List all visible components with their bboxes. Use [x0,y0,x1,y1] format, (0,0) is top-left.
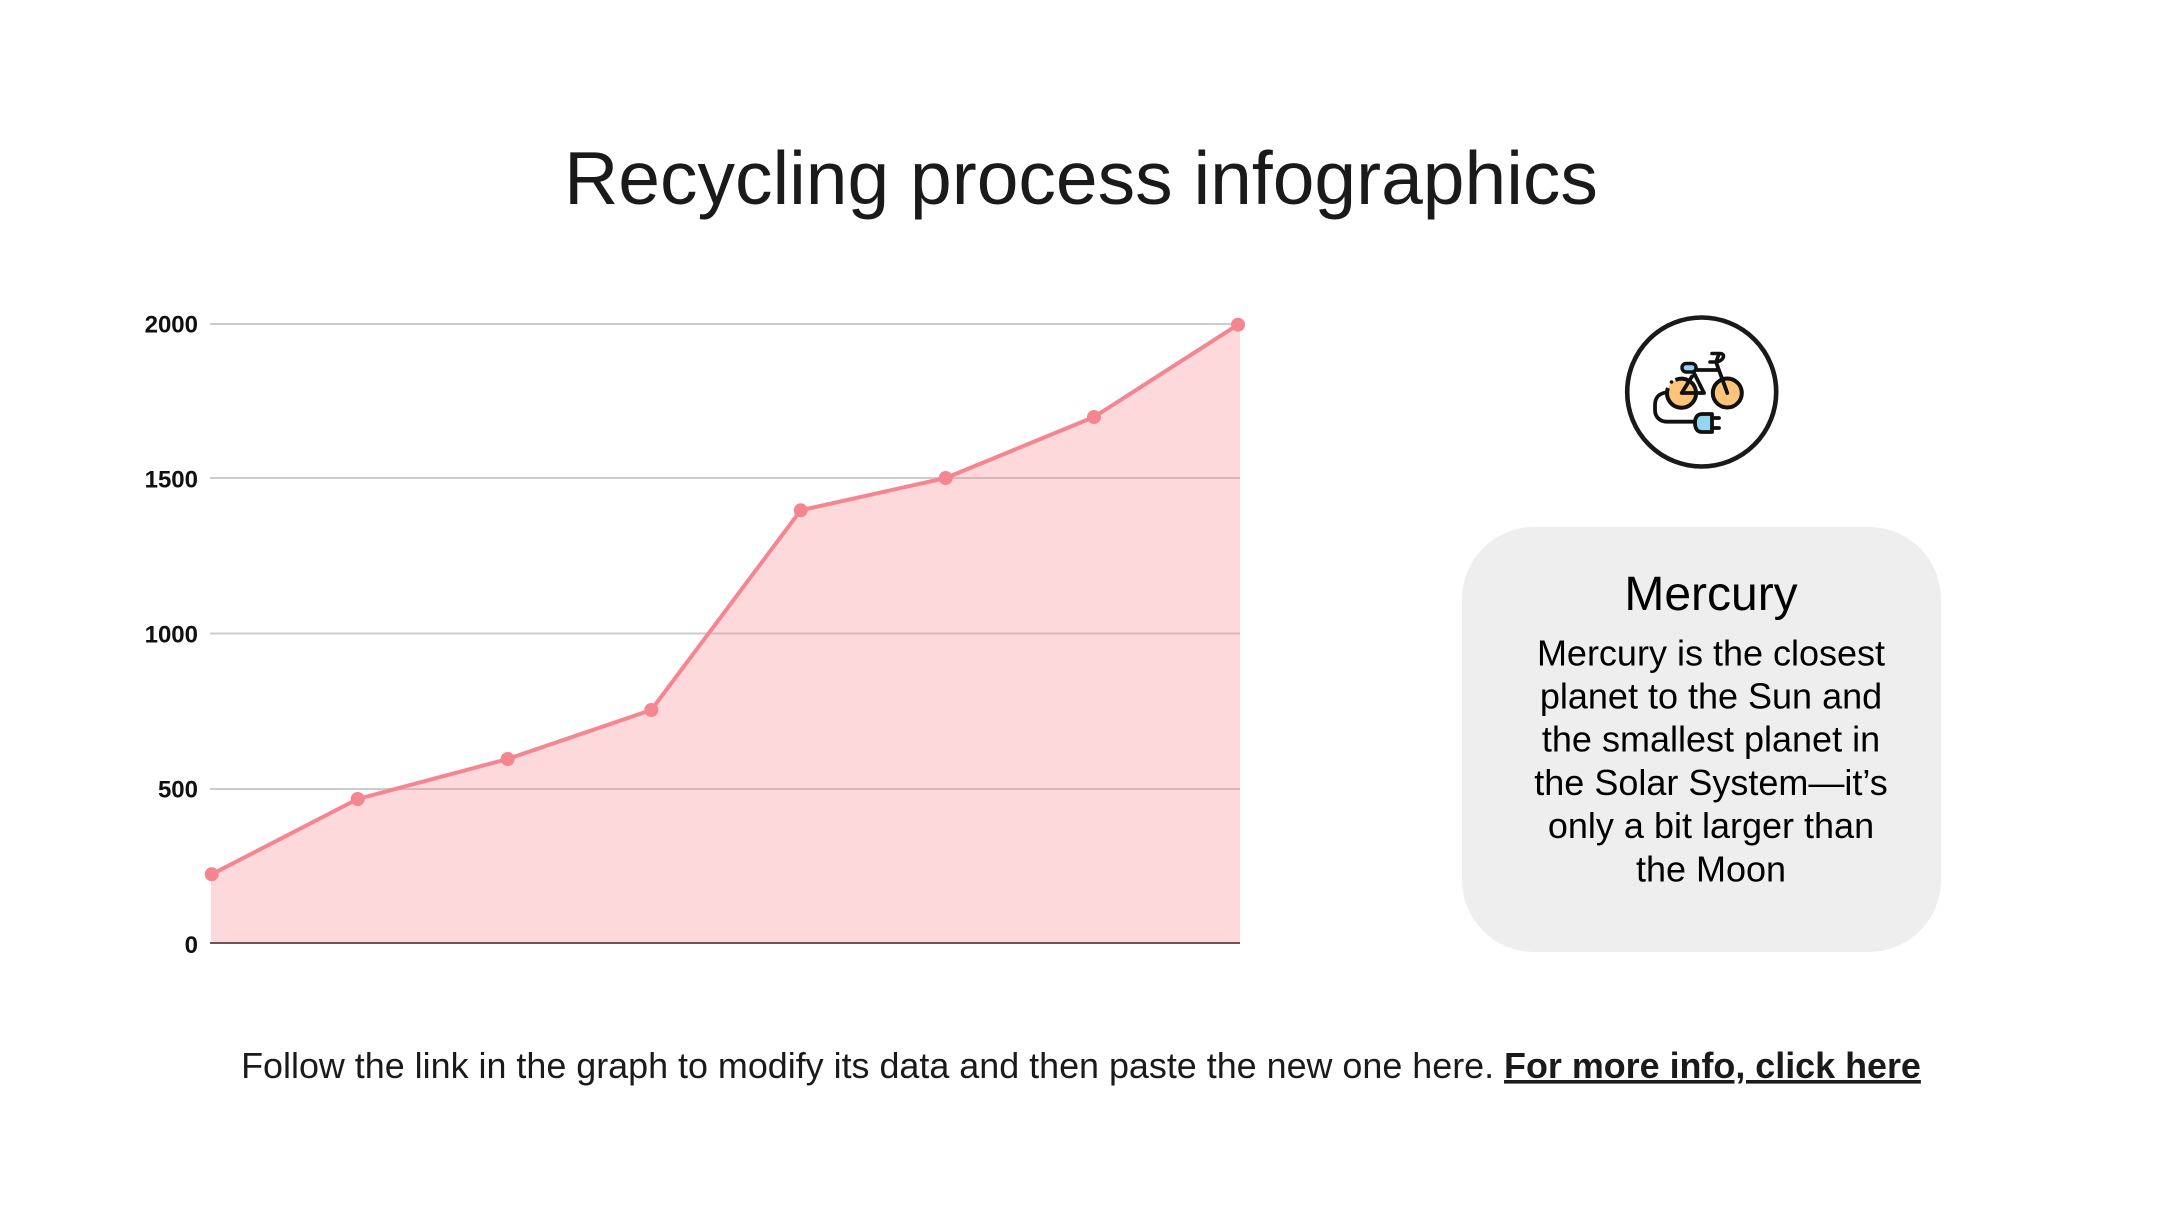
area chart [145,312,1245,959]
data points [205,318,1245,881]
panel: Mercury card [1462,527,1941,952]
data line [212,325,1238,874]
y axis labels: 1500 [145,466,198,494]
area fill [211,325,1240,943]
y axis labels: 500 [158,776,198,804]
y axis labels: 1000 [145,622,198,648]
card body text: Mercury is the closest [1537,632,1885,674]
icon: electric bicycle in circle [1627,318,1776,466]
footer note: Follow the link in the graph to modify its data and then paste the new one here. For more info, click here [241,1046,1921,1086]
title: Recycling process infographics [564,136,1598,220]
card body text: only a bit larger than [1548,805,1874,846]
y axis labels: 2000 [145,312,198,338]
card body text [1534,632,1888,890]
card body text: the Solar System—it’s [1534,762,1888,803]
card heading: Mercury [1624,568,1798,621]
y axis labels [145,312,198,959]
card body text: the smallest planet in [1542,718,1880,760]
card body text: the Moon [1636,848,1786,890]
y axis labels: 0 [185,932,198,959]
card body text: planet to the Sun and [1540,676,1882,716]
baseline axis [210,942,1240,944]
